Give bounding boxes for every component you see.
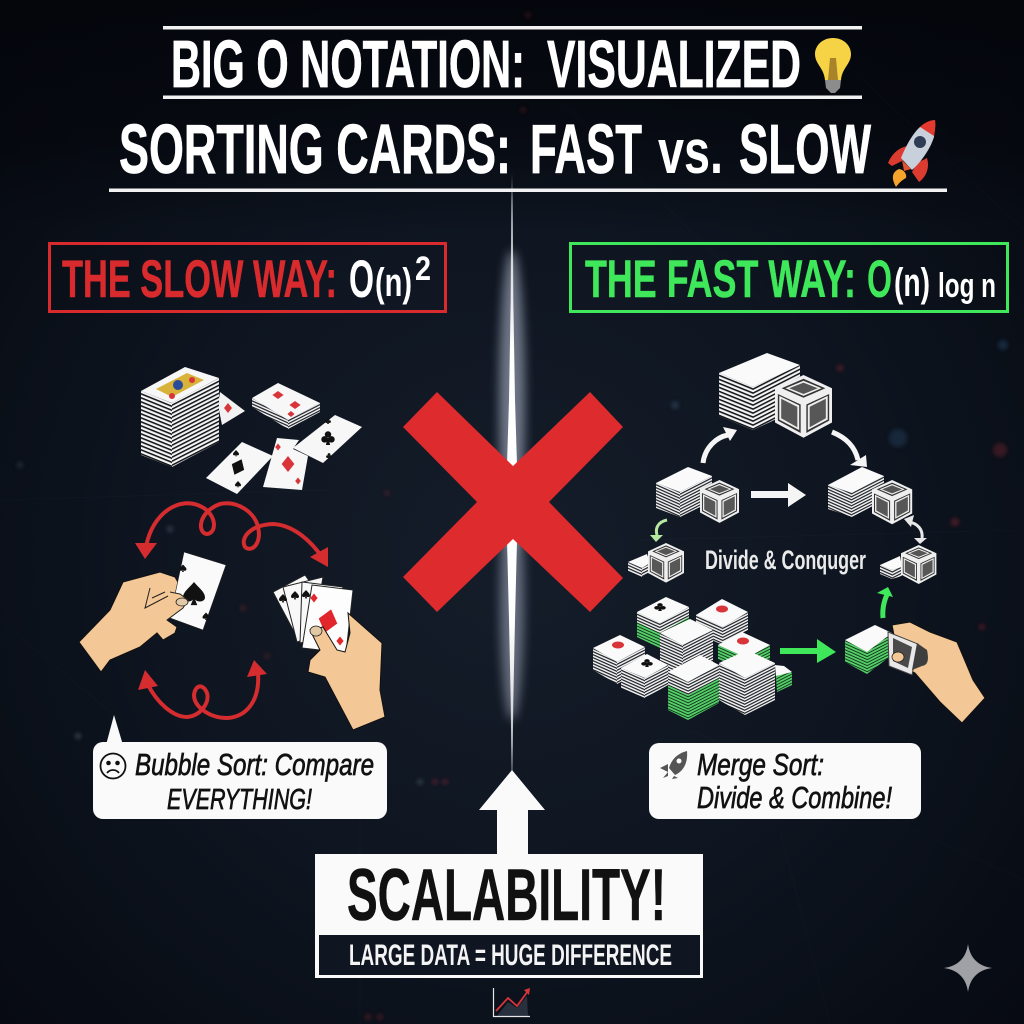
callout: bubble sort: EVERYTHING! bbox=[167, 784, 312, 816]
icon: gray rocket bbox=[660, 751, 687, 779]
illustration: hand placing green stack and cube bbox=[845, 622, 985, 723]
arrow: straight middle bbox=[751, 483, 806, 507]
icon: rocket bbox=[888, 120, 935, 187]
arrows: bottom red loops bbox=[138, 660, 267, 718]
illustration: small right stack and cube bbox=[880, 545, 936, 584]
arrow: small white right bbox=[904, 515, 927, 544]
icon: lightbulb bbox=[815, 38, 851, 93]
callout: merge sort: Merge Sort: bbox=[697, 747, 824, 782]
callout: merge sort bbox=[649, 743, 921, 819]
slow label: (n) bbox=[375, 261, 412, 305]
callout: bubble sort bbox=[93, 715, 387, 819]
title line 1: BIG O NOTATION: bbox=[171, 27, 525, 102]
icon: sad face bbox=[100, 754, 126, 778]
slow label: O bbox=[349, 250, 374, 309]
callout: merge sort: Divide & Combine! bbox=[697, 780, 892, 815]
illustration: small left stack and cube bbox=[628, 543, 684, 583]
title line 2: vs. bbox=[658, 118, 723, 187]
illustration: cluster of stacks bbox=[593, 597, 792, 720]
divide and conquer label: Divide & Conquger bbox=[705, 545, 866, 575]
red cross bbox=[403, 392, 623, 612]
arrow: green straight bbox=[780, 639, 836, 663]
illustration: left hand holding ace of spades bbox=[79, 552, 226, 672]
illustration: middle left stack and cube bbox=[656, 467, 739, 523]
illustration: unsorted card pile bbox=[141, 367, 362, 494]
title line 2: SLOW bbox=[739, 110, 871, 188]
icon: growth chart bbox=[494, 988, 530, 1016]
illustration: large merge stack and cube bbox=[719, 353, 832, 438]
fast label: THE FAST WAY: bbox=[585, 250, 856, 309]
illustration: middle right stack and cube bbox=[828, 467, 912, 524]
title line 2: SORTING CARDS: bbox=[119, 110, 511, 188]
arrow: green curved up bbox=[877, 587, 893, 618]
callout: bubble sort: Bubble Sort: Compare bbox=[135, 747, 374, 782]
icon: sparkle bbox=[944, 944, 992, 992]
arrow: curved up to large stack bbox=[703, 427, 737, 463]
arrows: top red loops bbox=[135, 503, 328, 567]
arrow: small light green bbox=[650, 520, 667, 542]
illustration: right hand holding fan of cards bbox=[273, 575, 385, 730]
fast label: O bbox=[867, 250, 892, 309]
title line 2 bbox=[109, 110, 947, 192]
fast label: (n) bbox=[894, 261, 930, 305]
arrow: scalability up bbox=[479, 770, 545, 856]
title line 2: FAST bbox=[530, 110, 642, 188]
scalability panel bbox=[315, 854, 703, 978]
scalability panel: LARGE DATA = HUGE DIFFERENCE bbox=[349, 939, 672, 972]
title line 1: VISUALIZED bbox=[547, 27, 801, 102]
fast label: log n bbox=[938, 267, 996, 305]
arrow: curved down from large stack bbox=[832, 432, 867, 467]
scalability panel: SCALABILITY! bbox=[347, 855, 666, 936]
slow label: 2 bbox=[415, 250, 431, 288]
slow label: THE SLOW WAY: bbox=[62, 250, 337, 309]
central light beam bbox=[499, 172, 525, 775]
